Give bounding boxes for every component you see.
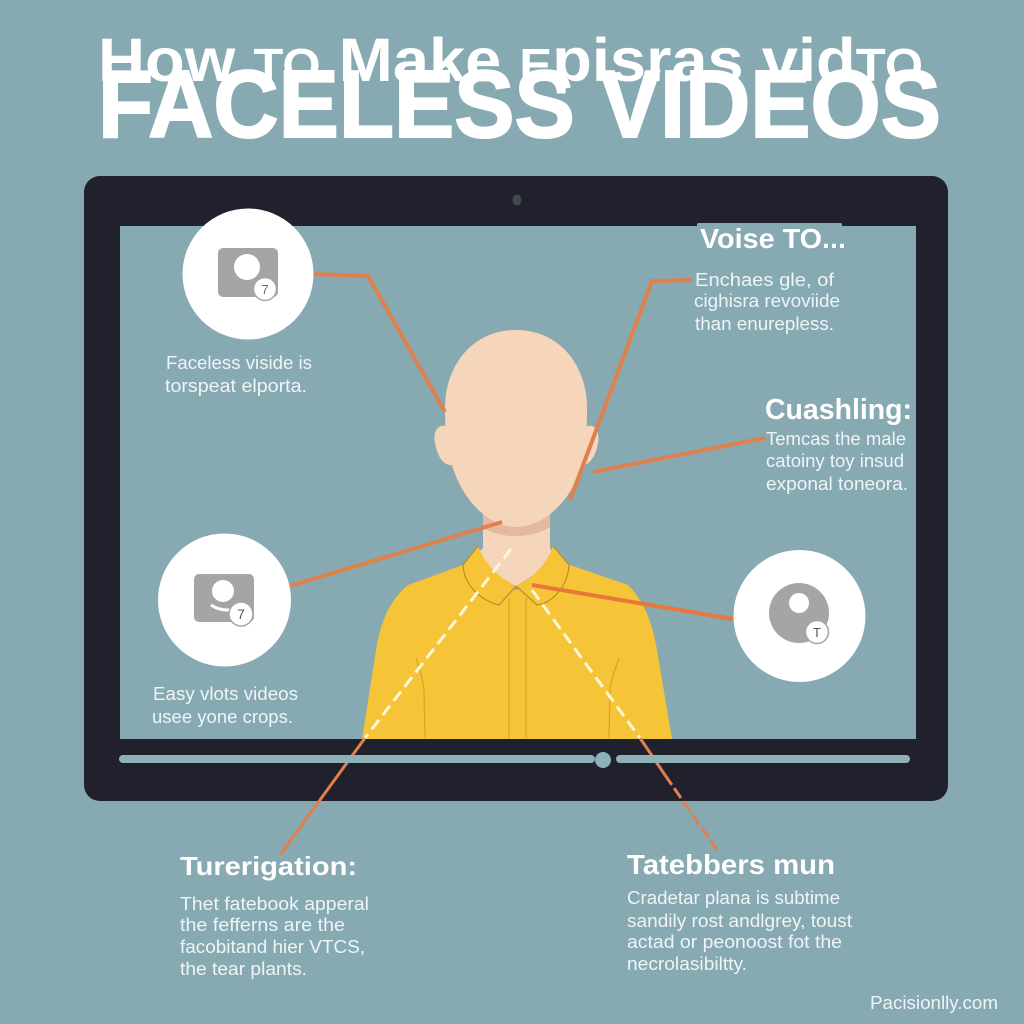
text block: turerigation: facobitand hier VTCS, — [180, 937, 365, 957]
title: FACELESS VIDEOS — [98, 51, 941, 158]
head — [445, 330, 587, 527]
text block: turerigation: Turerigation: — [180, 851, 357, 881]
text block: cuashling: Cuashling: — [765, 394, 912, 426]
text block: easy videos note — [152, 684, 298, 727]
text block: faceless note — [165, 353, 312, 396]
text block: tatebbers: actad or peonoost fot the — [627, 932, 842, 952]
text block: voise: cighisra revoviide — [694, 291, 840, 311]
text block: turerigation: the fefferns are the — [180, 915, 345, 935]
icon circle: top left: 7 — [261, 282, 269, 297]
collar — [463, 546, 569, 605]
icon circle: lower right — [734, 550, 866, 682]
icon circle: lower right: T — [813, 625, 821, 640]
text block: faceless note: Faceless viside is — [166, 353, 312, 373]
laptop screen frame — [84, 176, 948, 801]
shirt — [362, 565, 672, 739]
text block: turerigation — [180, 851, 369, 979]
text block: voise: Voise TO... — [700, 223, 846, 254]
title: How TO Make Episras vid TO — [98, 26, 923, 94]
video progress bar — [119, 752, 910, 768]
text block: voise: Enchaes gle, of — [695, 270, 835, 290]
text block: tatebbers: necrolasibiltty. — [627, 954, 747, 974]
text block: voise — [694, 223, 846, 334]
dashed guide lines — [365, 549, 640, 738]
faceless person illustration — [362, 330, 672, 739]
text block: tatebbers: sandily rost andlgrey, toust — [627, 911, 852, 931]
text block: cuashling: catoiny toy insud — [766, 451, 904, 471]
text block: tatebbers: Tatebbers mun — [627, 849, 835, 880]
icon circle: top left — [182, 208, 314, 340]
icon circle: lower left: 7 — [237, 606, 245, 622]
text block: cuashling: exponal toneora. — [766, 474, 908, 494]
source credit: Pacisionlly.com — [870, 993, 998, 1013]
ears — [434, 426, 599, 465]
icon circle: lower left — [158, 534, 291, 666]
text block: turerigation: Thet fatebook apperal — [180, 894, 369, 914]
text block: tatebbers: Cradetar plana is subtime — [627, 888, 840, 908]
text block: voise: than enurepless. — [695, 314, 834, 334]
connector lines — [280, 274, 765, 855]
text block: easy videos note: Easy vlots videos — [153, 684, 298, 704]
text block: faceless note: torspeat elporta. — [165, 376, 307, 396]
text block: cuashling: Temcas the male — [766, 429, 906, 449]
neck shadow — [483, 515, 550, 536]
neck — [478, 505, 553, 586]
text block: turerigation: the tear plants. — [180, 959, 307, 979]
text block: easy videos note: usee yone crops. — [152, 707, 293, 727]
text block: tatebbers — [627, 849, 852, 974]
text block: cuashling — [765, 394, 912, 494]
